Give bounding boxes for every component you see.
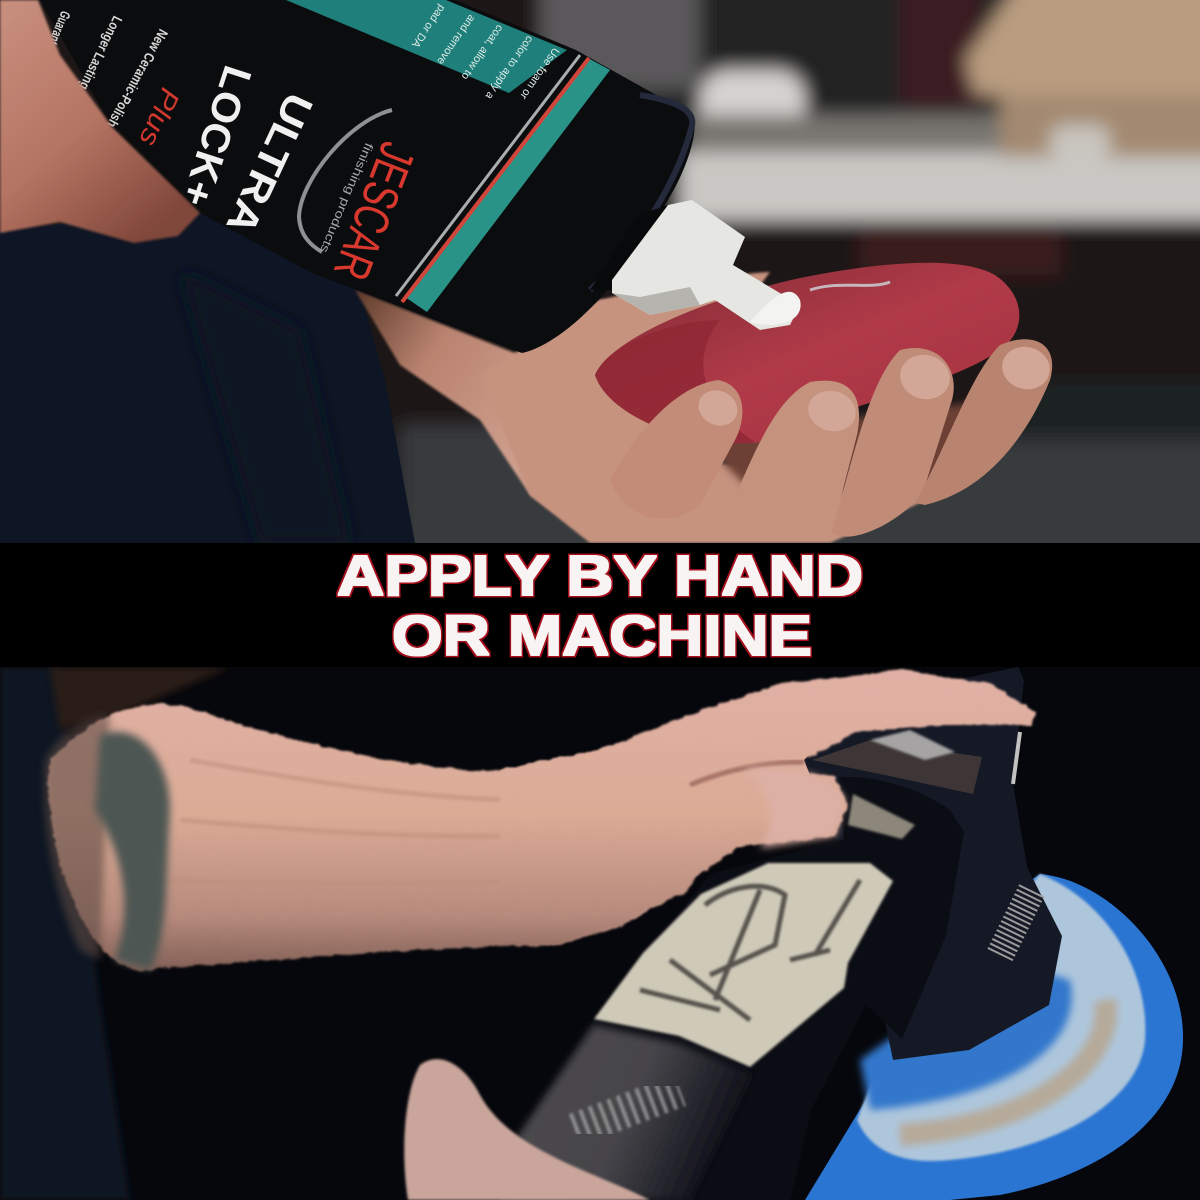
label instructions: Use foam or	[517, 45, 561, 102]
finger 3	[832, 348, 954, 537]
plus script: Plus	[133, 84, 186, 151]
bottle of Ultra Lock Plus	[40, 0, 695, 353]
label instructions: color to apply a	[482, 33, 535, 102]
sub brand text: finishing products	[317, 141, 376, 255]
label instructions: coat, allow to	[459, 22, 505, 82]
blurred shirt sleeve	[0, 667, 130, 1200]
tattoo	[95, 732, 170, 970]
vents	[1000, 890, 1032, 955]
barrel vents	[575, 1090, 680, 1130]
hand on top of machine	[500, 670, 1036, 946]
white nozzle cap	[590, 200, 801, 330]
lower barrel grey section	[500, 1025, 752, 1200]
tan motion band	[900, 1000, 1106, 1135]
label instructions: and remove	[434, 12, 477, 67]
finger 4	[915, 339, 1052, 505]
blurred left end of arm	[44, 715, 110, 960]
caption: apply by hand or machine: APPLY BY HAND	[337, 544, 863, 608]
silver label arc	[299, 110, 392, 252]
thumb shading	[745, 768, 845, 848]
product name: LOCK+	[173, 60, 259, 212]
teal label band	[286, 0, 567, 93]
dark background	[0, 667, 1200, 1200]
right hand cupping the pad	[355, 263, 1055, 543]
forearm	[49, 705, 860, 970]
grey barrel highlight	[848, 794, 915, 839]
palm	[480, 272, 930, 543]
label instructions	[409, 2, 561, 102]
grey flake highlight	[870, 730, 955, 760]
bottle body	[40, 0, 695, 353]
black caption band	[0, 543, 1200, 667]
machine barrel	[500, 777, 964, 1200]
shirt fold shading	[180, 270, 350, 543]
tagline text: New Ceramic-Polish	[104, 27, 171, 131]
fingernails	[698, 346, 1050, 432]
teal ring	[405, 58, 610, 312]
product name: ULTRA	[217, 86, 321, 241]
brand text: JESCAR	[323, 135, 426, 288]
left hand holding the bottle	[0, 0, 200, 243]
finger 2	[740, 380, 860, 504]
sticker dark details	[640, 880, 860, 1020]
photo: applying product to a red pad by hand	[0, 0, 1200, 600]
knight sticker	[594, 863, 893, 1067]
red foam pad	[595, 263, 1019, 443]
tagline text: Longer Lasting	[76, 14, 126, 93]
inner blue band	[860, 960, 1072, 1110]
polisher machine	[500, 667, 1062, 1200]
carbon grip texture	[812, 740, 982, 794]
crease between finger and thumb	[690, 762, 804, 785]
machine head and neck	[804, 667, 1062, 1060]
silver strip	[1013, 732, 1020, 784]
tagline text	[51, 12, 168, 126]
finger 1	[639, 380, 742, 466]
tagline text: Guarante	[44, 9, 74, 52]
product name	[187, 66, 313, 226]
blue spinning pad	[805, 874, 1183, 1200]
workshop background	[0, 0, 1200, 600]
pad darker edge	[595, 320, 755, 443]
wrist	[354, 290, 608, 528]
bottle end rim	[590, 95, 692, 290]
dark navy shirt	[0, 210, 415, 543]
photo: polishing with a dual-action machine	[0, 667, 1200, 1200]
dispensed polish	[750, 292, 801, 325]
red ring	[402, 58, 589, 302]
blurred shoulder skin	[50, 667, 230, 730]
shadow between the fingers	[720, 398, 966, 497]
arm hair streaks	[180, 758, 500, 838]
caption: apply by hand or machine: OR MACHINE	[392, 604, 812, 668]
caption: apply by hand or machine	[337, 544, 863, 668]
bright blue outer rim	[805, 874, 1183, 1200]
silver ring line	[396, 55, 580, 296]
label instructions: pad or DA	[409, 2, 447, 50]
pale foam layer	[857, 874, 1145, 1161]
lower hand	[404, 1059, 650, 1200]
polish squiggle on pad	[810, 282, 890, 290]
